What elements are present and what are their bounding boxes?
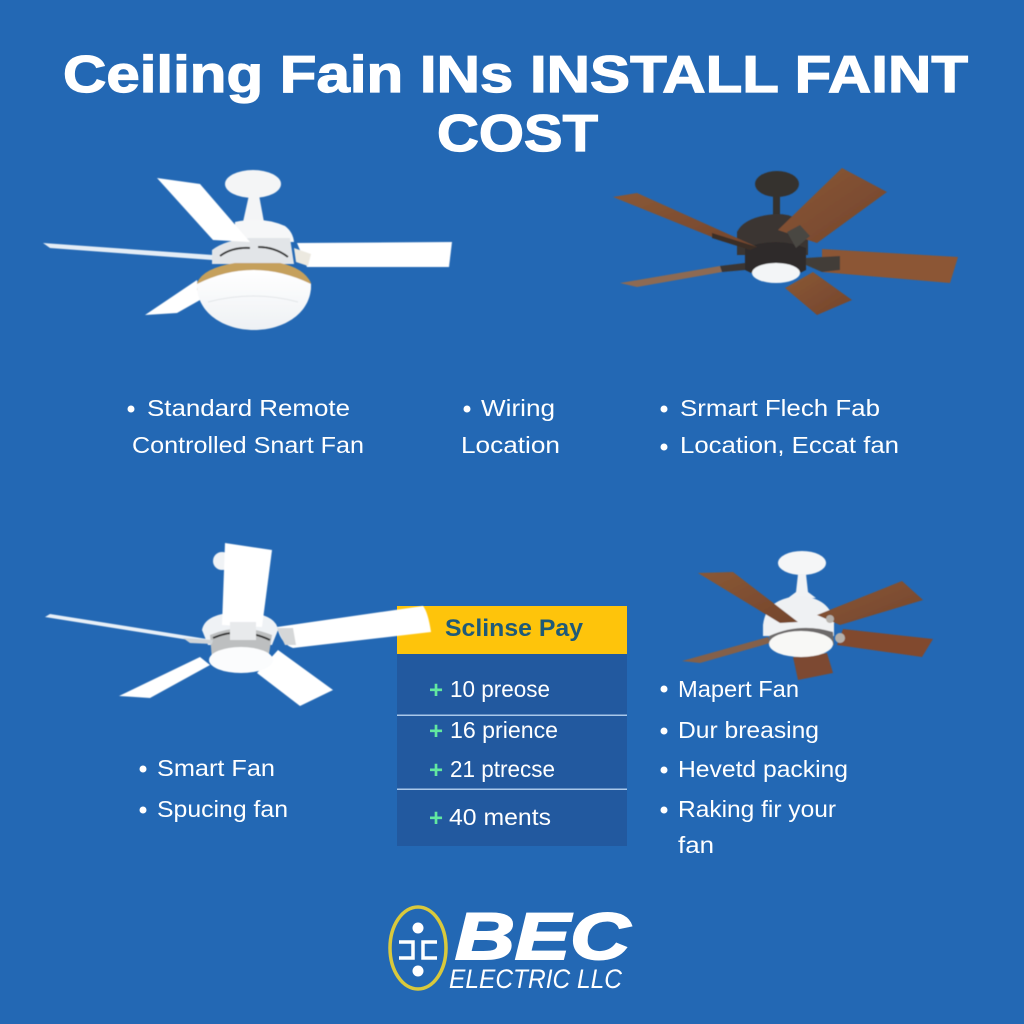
- list: lower right: Raking fir your: [678, 796, 836, 822]
- price row 2: +: [429, 718, 443, 745]
- list: lower right: Mapert Fan: [678, 676, 799, 702]
- list: lower right: Hevetd packing: [678, 756, 848, 782]
- fan: dark with wood blades: [613, 168, 958, 315]
- fan: white flush mount: [45, 543, 431, 706]
- list: standard remote fan: Standard Remote: [147, 395, 350, 421]
- list: wiring location: Location: [461, 432, 560, 458]
- list: smart fan lower left: Spucing fan: [157, 796, 288, 822]
- list: lower right: fan: [678, 832, 714, 858]
- list: lower right: [660, 676, 848, 858]
- title: [63, 46, 968, 163]
- price row 3: +: [429, 757, 443, 784]
- logo wordmark: BEC: [455, 899, 632, 973]
- price row 3: 21 ptrecse: [450, 756, 555, 782]
- price row 2: 16 prience: [450, 717, 558, 743]
- list: lower right: Dur breasing: [678, 717, 819, 743]
- price row 1: 10 preose: [450, 676, 550, 702]
- price row 4: +: [429, 805, 443, 832]
- title: Ceiling Fain INs INSTALL FAINT: [63, 46, 968, 104]
- title: COST: [437, 105, 598, 163]
- price row 1: +: [429, 677, 443, 704]
- panel: pricing list: [397, 606, 627, 846]
- logo wordmark: ELECTRIC LLC: [449, 964, 622, 994]
- list: smart fan lower left: Smart Fan: [157, 755, 275, 781]
- fan: white with wood blades: [682, 551, 933, 680]
- list: standard remote fan: [128, 395, 364, 458]
- logo: BEC Electric LLC: [390, 899, 632, 994]
- price row 4: 40 ments: [449, 804, 551, 830]
- list: smart fan lower left: [140, 755, 288, 822]
- fan: white with gold band: [43, 170, 452, 330]
- list: wiring location: Wiring: [481, 395, 555, 421]
- logo wordmark: [449, 899, 632, 994]
- panel heading: [397, 606, 627, 654]
- list: standard remote fan: Controlled Snart Fan: [132, 432, 364, 458]
- list: wiring location: [461, 395, 560, 458]
- panel heading: Sclinse Pay: [445, 615, 584, 642]
- list: smart fan top right: Location, Eccat fan: [680, 432, 899, 458]
- list: smart fan top right: Srmart Flech Fab: [680, 395, 880, 421]
- list: smart fan top right: [660, 395, 899, 458]
- logo emblem: [390, 907, 446, 989]
